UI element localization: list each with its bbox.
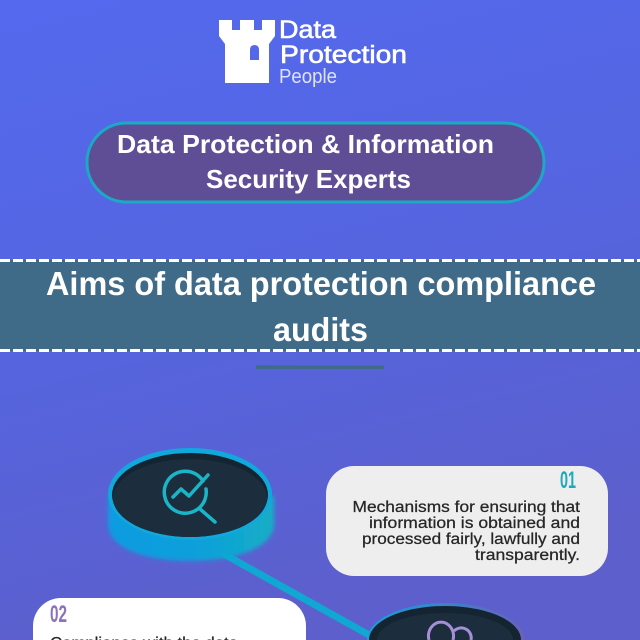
logo wordmark: People [279,66,337,88]
icon: overlapping circles [428,622,471,640]
panel: subtitle pill [87,123,544,202]
icon: magnifier with trend line [164,471,215,522]
card 01 text: information is obtained and [369,515,580,532]
subtitle text: Data Protection & Information [117,129,494,159]
card 01 text [352,499,581,564]
subtitle text [117,129,494,194]
icon: castle tower [219,20,275,83]
logo wordmark: Data [279,16,336,44]
panel: title band [0,260,640,351]
number 01: 01 [560,467,576,494]
title: audits [273,311,368,348]
title underline [256,366,384,369]
card 01 text: Mechanisms for ensuring that [352,499,581,516]
disc 2: people icon [367,603,525,640]
card 01 text: transparently. [475,547,580,564]
connector line between discs [222,553,378,640]
panel: card 02 [33,598,306,640]
number 02: 02 [50,601,67,628]
logo: Data Protection People [219,16,407,88]
title [46,265,596,348]
logo wordmark [279,16,407,88]
disc 1: analytics icon [108,448,274,561]
logo wordmark: Protection [280,41,407,69]
subtitle text: Security Experts [206,164,411,194]
card 01 text: processed fairly, lawfully and [362,531,580,548]
panel: card 01 [326,466,608,576]
title: Aims of data protection compliance [46,265,596,302]
